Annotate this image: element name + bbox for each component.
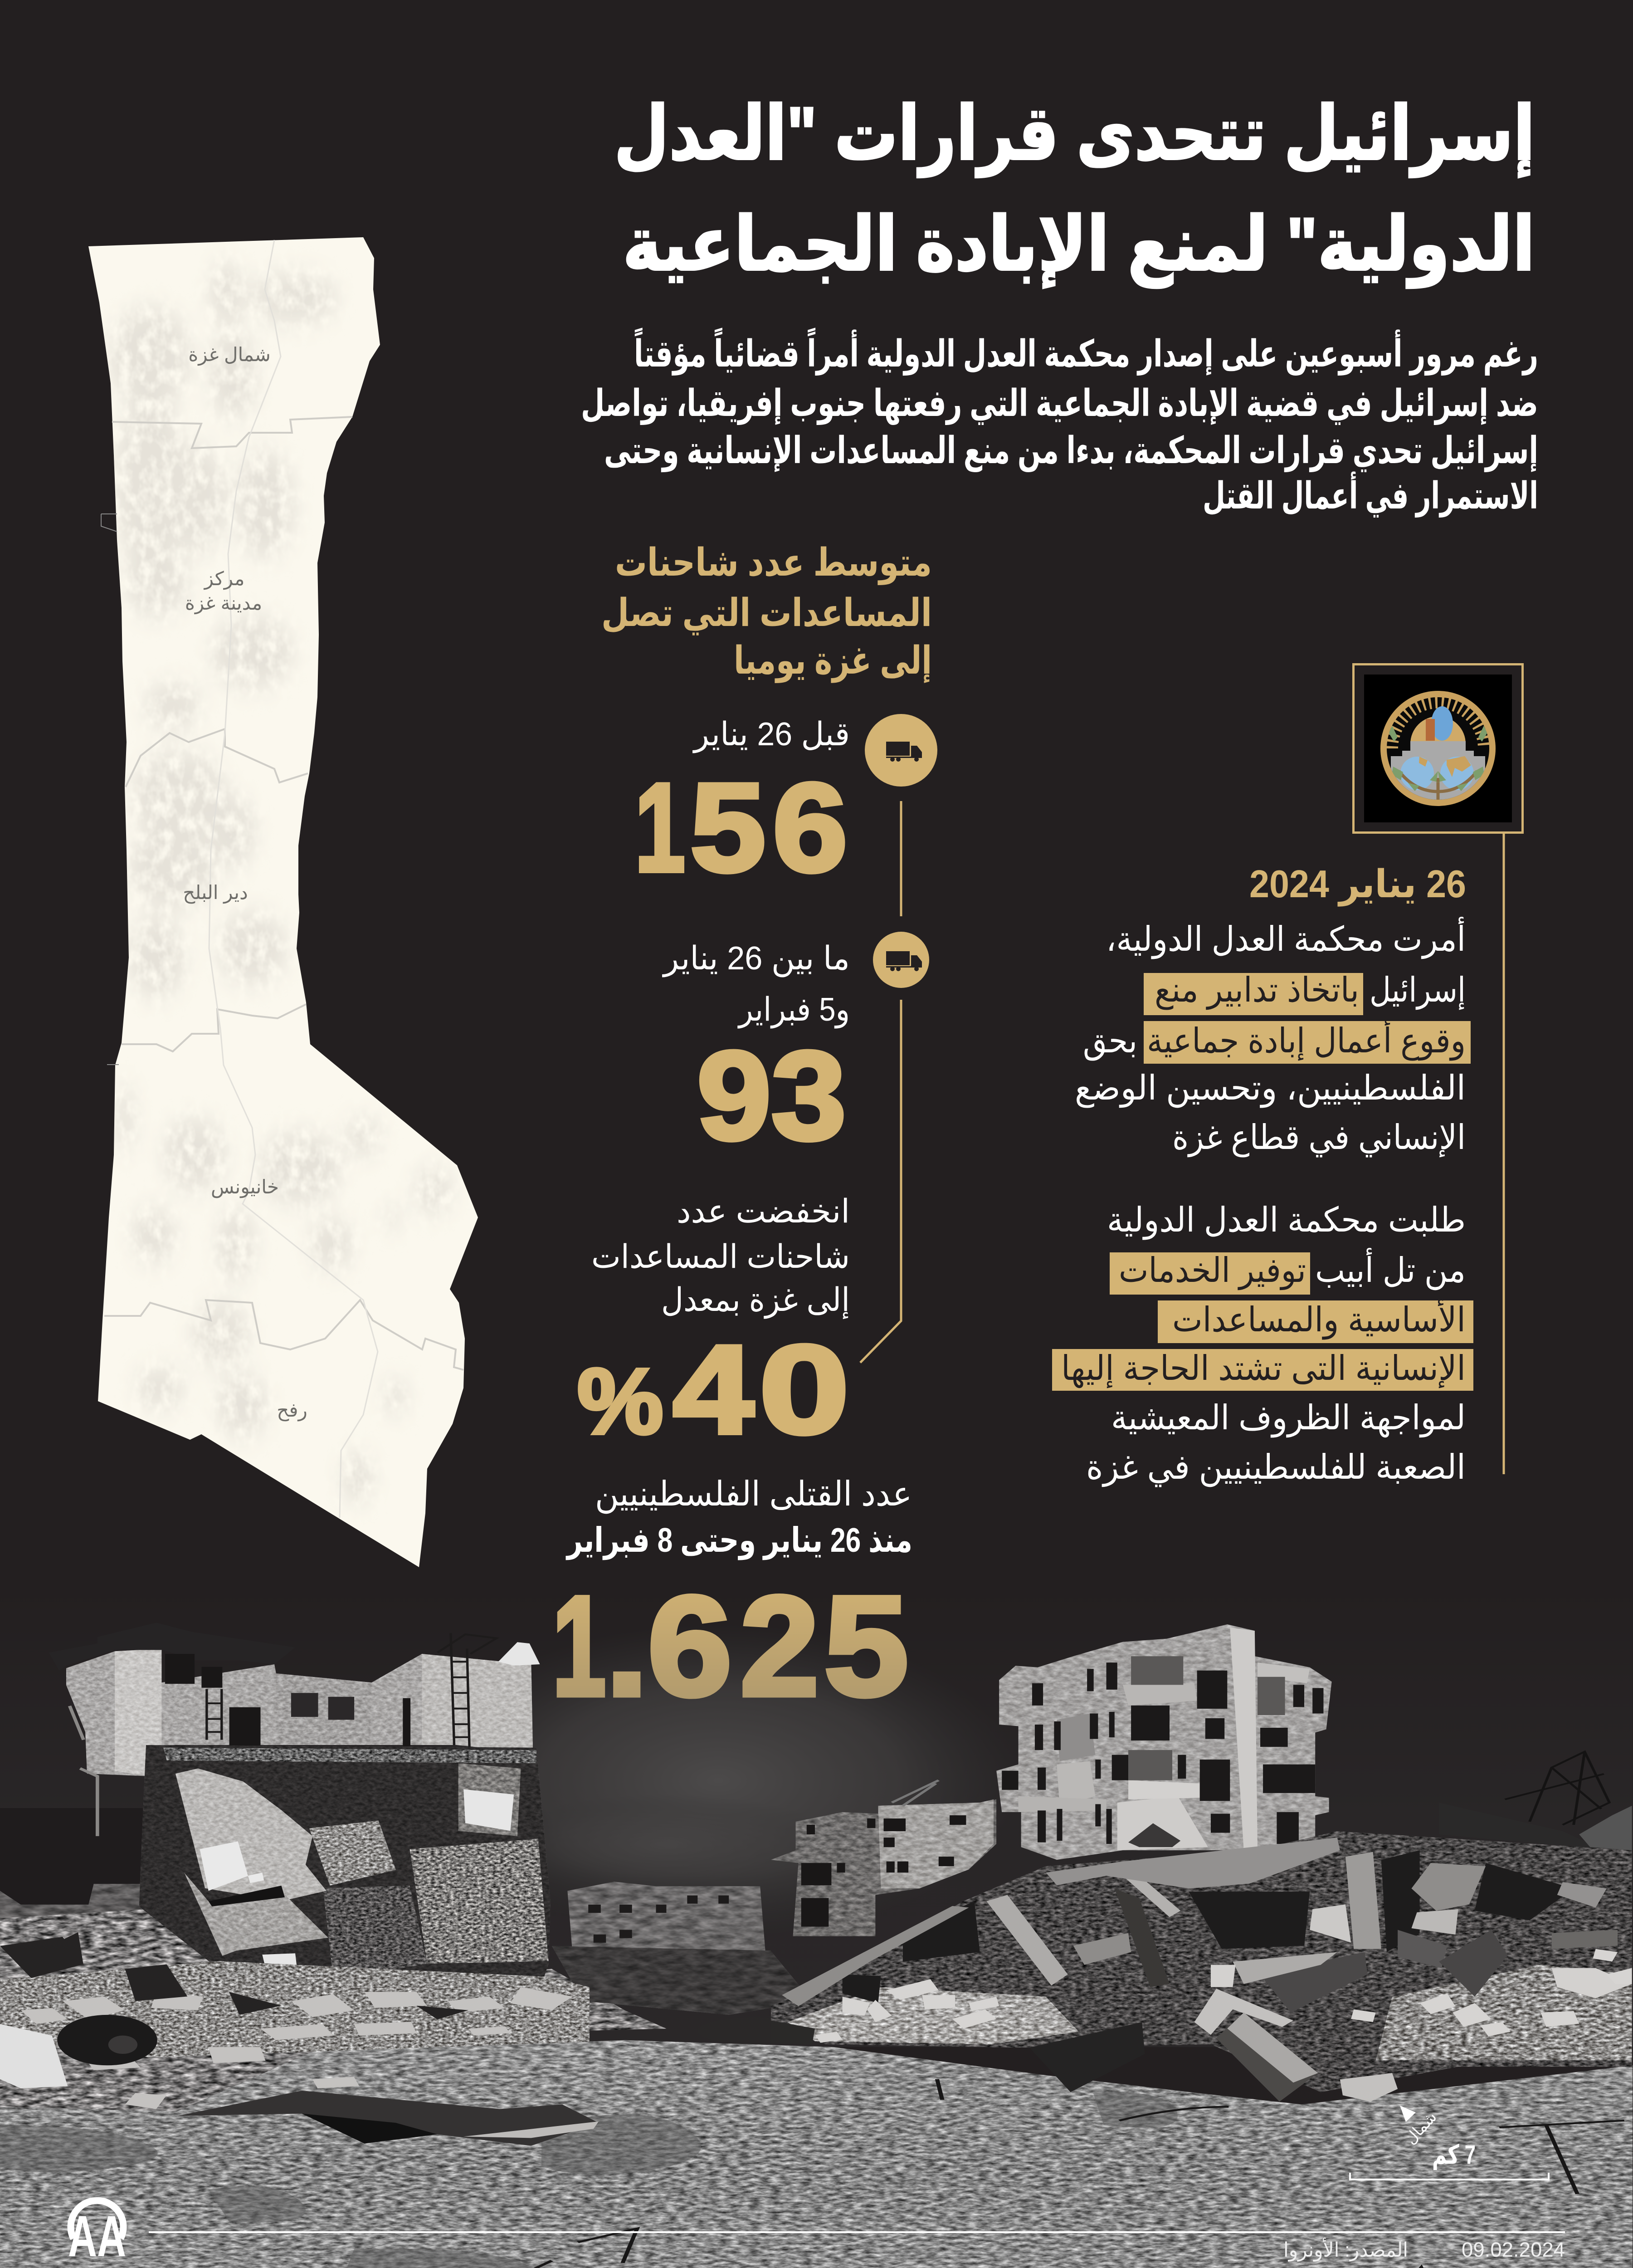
court seal frame <box>1353 664 1523 833</box>
death toll label: عدد القتلى الفلسطينيين <box>595 1475 912 1514</box>
date heading: 26 يناير 2024 <box>1249 863 1466 907</box>
highlight <box>1110 1252 1310 1295</box>
right rubble <box>771 1752 1632 2102</box>
photo: destroyed buildings and rubble <box>0 1588 1633 2268</box>
label: before 26 January: قبل 26 يناير <box>692 716 850 753</box>
map labels: دير البلح <box>183 882 248 904</box>
paragraph 2 <box>1052 1201 1473 1487</box>
highlight <box>1144 1021 1471 1064</box>
scale bar <box>1350 2140 1549 2180</box>
number 93: 9 <box>697 1026 771 1166</box>
governorate boundaries <box>101 240 463 1518</box>
date: 09.02.2024 <box>1462 2238 1565 2261</box>
paragraph 2: الأساسية والمساعدات <box>1172 1299 1466 1340</box>
paragraph 1: الفلسطينيين، وتحسين الوضع <box>1075 1069 1466 1108</box>
logo: Anadolu Agency <box>68 2200 126 2268</box>
tower block <box>996 1624 1332 1860</box>
upper floor walls <box>66 1649 533 1776</box>
urban areas <box>109 263 453 1503</box>
number 1.625: 5 <box>824 1567 908 1725</box>
number 93: 3 <box>771 1025 846 1166</box>
map labels <box>183 344 307 1422</box>
icon: court seal <box>1380 691 1496 807</box>
label: drop in trucks <box>591 1193 850 1319</box>
icon: truck 26 January to 5 February <box>873 932 929 988</box>
label: between 26 January and 5 February: ما بين 26 يناير <box>662 940 850 978</box>
paragraph 1: باتخاذ تدابير منع <box>1155 971 1359 1010</box>
highlight <box>1052 1349 1473 1391</box>
icon: north arrow: شمال <box>1402 2108 1440 2148</box>
map labels: رفح <box>277 1399 307 1422</box>
map of Gaza <box>88 237 478 1567</box>
scale bar: 7 كم <box>1432 2140 1476 2170</box>
aid trucks heading: المساعدات التي تصل <box>601 591 932 635</box>
label: between 26 January and 5 February <box>662 940 850 1029</box>
number 40 percent: 0 <box>759 1320 849 1460</box>
death toll label: منذ 26 يناير وحتى 8 فبراير <box>565 1521 912 1560</box>
paragraph 1: الإنساني في قطاع غزة <box>1172 1118 1466 1158</box>
aid trucks heading: إلى غزة يوميا <box>734 639 932 683</box>
number 1.625: 2 <box>740 1567 819 1725</box>
map land <box>88 237 478 1567</box>
panel: death toll <box>552 1475 912 1725</box>
paragraph 1 <box>1075 917 1471 1158</box>
map labels: شمال غزة <box>188 344 271 366</box>
icon: truck before 26 January <box>865 714 937 787</box>
title <box>614 92 1535 288</box>
paragraph 1: أمرت محكمة العدل الدولية، <box>1106 917 1466 959</box>
paragraph 1: بحق <box>1083 1022 1137 1061</box>
paragraph 2: من تل أبيب <box>1315 1248 1466 1290</box>
intro text <box>581 327 1538 518</box>
timeline segment <box>900 801 902 916</box>
mid-ground damaged building <box>771 1780 996 1936</box>
left building <box>49 1623 551 1990</box>
label: drop in trucks: إلى غزة بمعدل <box>661 1282 850 1319</box>
number 1.625: . <box>605 1567 648 1725</box>
highlight <box>1158 1300 1473 1343</box>
timeline line <box>1503 834 1505 1474</box>
panel: court order <box>1052 664 1523 1487</box>
number 156: 5 <box>690 758 765 898</box>
sky and smoke <box>0 1588 1633 2047</box>
number 1.625: 1 <box>552 1567 606 1725</box>
left rubble foreground <box>0 1932 590 2109</box>
label: drop in trucks: انخفضت عدد <box>677 1193 850 1230</box>
footer rule <box>149 2231 1565 2233</box>
panel: aid trucks <box>577 541 937 1460</box>
aid trucks heading: متوسط عدد شاحنات <box>615 541 932 585</box>
map labels: مدينة غزة <box>185 592 262 614</box>
logo: Anadolu Agency: AA <box>68 2204 126 2268</box>
paragraph 1: وقوع أعمال إبادة جماعية <box>1147 1018 1466 1061</box>
number 1.625 <box>552 1567 908 1725</box>
number 156: 1 <box>635 758 685 898</box>
label: between 26 January and 5 February: و5 فبراير <box>737 992 850 1029</box>
right building group <box>771 1624 1332 1936</box>
paragraph 1: إسرائيل <box>1370 971 1466 1010</box>
timeline connector <box>860 1000 901 1363</box>
highlight <box>1144 973 1363 1015</box>
death toll label <box>565 1475 912 1560</box>
number 40 percent: 4 <box>673 1320 755 1460</box>
paragraph 2: توفير الخدمات <box>1119 1251 1306 1290</box>
title line 2: الدولية" لمنع الإبادة الجماعية <box>623 202 1535 288</box>
lower collapsed floor <box>139 1745 551 1990</box>
number 40 percent: % <box>577 1350 663 1453</box>
paragraph 2: لمواجهة الظروف المعيشية <box>1111 1398 1466 1438</box>
far buildings and left rubble <box>0 1882 812 2112</box>
map labels: خانيونس <box>211 1176 279 1198</box>
number 1.625: 6 <box>648 1567 732 1725</box>
label: drop in trucks: شاحنات المساعدات <box>591 1239 850 1275</box>
ground <box>0 2040 1633 2268</box>
number 93 <box>697 1025 846 1166</box>
paragraph 2: الصعبة للفلسطينيين في غزة <box>1086 1448 1466 1487</box>
number 156: 6 <box>773 757 848 898</box>
tarp and foreground debris <box>177 2079 1624 2268</box>
number 40 percent <box>577 1320 849 1460</box>
paragraph 2: الإنسانية التى تشتد الحاجة إليها <box>1061 1349 1466 1388</box>
map labels: مركز <box>204 568 244 590</box>
aid trucks heading <box>601 541 932 683</box>
paragraph 2: طلبت محكمة العدل الدولية <box>1107 1201 1466 1240</box>
number 156 <box>635 757 848 898</box>
source: المصدر: الأونروا <box>1283 2237 1408 2262</box>
